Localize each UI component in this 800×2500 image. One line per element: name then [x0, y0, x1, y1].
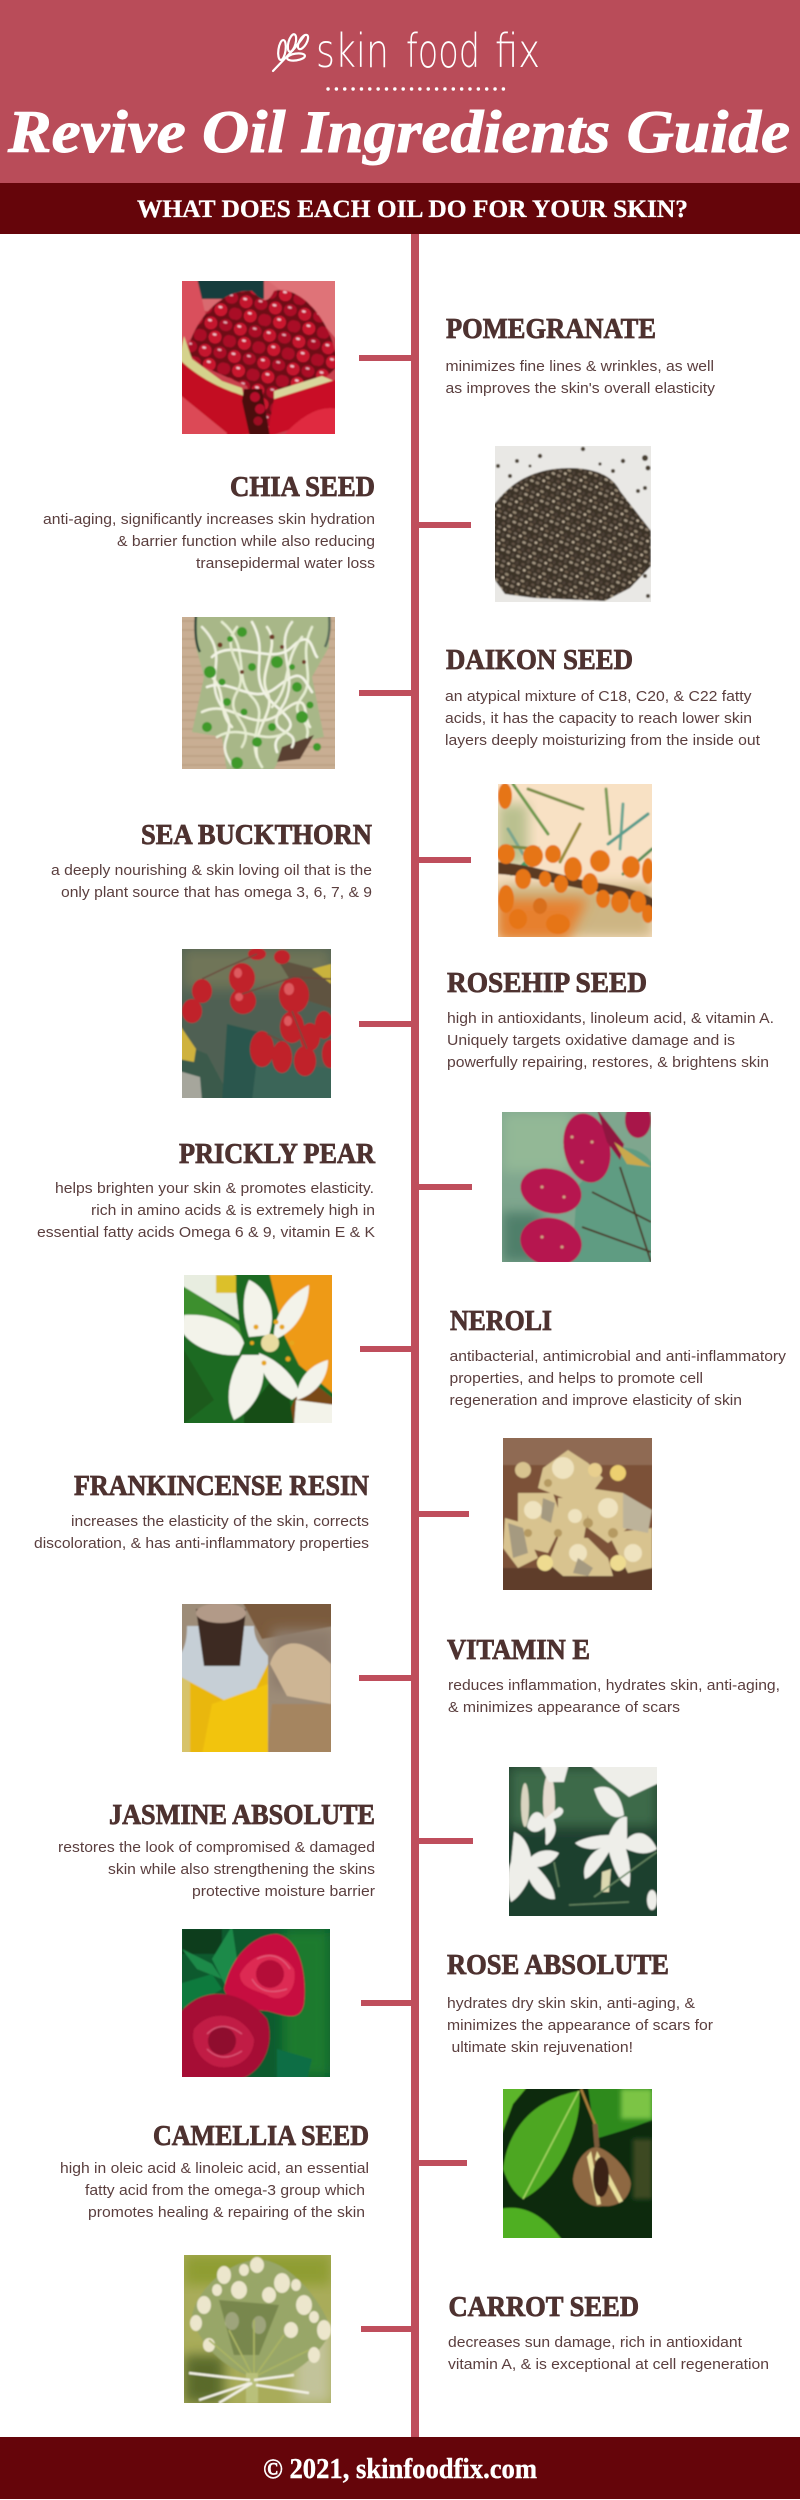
- heading: ROSEHIP SEED: [447, 967, 647, 999]
- heading: ROSE ABSOLUTE: [447, 1949, 669, 1981]
- panel: chia seed: [43, 443, 654, 605]
- panel: frankincense resin: [34, 1435, 655, 1593]
- description: [43, 511, 375, 572]
- description: anti-aging, significantly increases skin hydration: [43, 511, 375, 528]
- description: skin while also strengthening the skins: [108, 1861, 375, 1878]
- description: as improves the skin's overall elasticity: [446, 380, 716, 397]
- description: promotes healing & repairing of the skin: [88, 2204, 365, 2221]
- photo: sea buckthorn: [498, 784, 652, 937]
- panel: rose absolute: [179, 1926, 713, 2080]
- description: ultimate skin rejuvenation!: [452, 2039, 633, 2056]
- description: [450, 1348, 787, 1409]
- panel: carrot seed: [181, 2252, 769, 2406]
- description: discoloration, & has anti-inflammatory properties: [34, 1535, 369, 1552]
- heading: JASMINE ABSOLUTE: [109, 1799, 375, 1831]
- description: only plant source that has omega 3, 6, 7, & 9: [61, 884, 372, 901]
- subtitle band: [0, 183, 800, 234]
- description: reduces inflammation, hydrates skin, anti-aging,: [448, 1677, 780, 1694]
- heading: NEROLI: [450, 1305, 552, 1337]
- connector: [419, 2160, 467, 2166]
- heading: CHIA SEED: [230, 471, 375, 503]
- panel: camellia seed: [60, 2086, 655, 2241]
- photo: daikon sprouts: [182, 617, 335, 769]
- panel: vitamin e: [179, 1601, 780, 1755]
- heading: FRANKINCENSE RESIN: [74, 1470, 369, 1502]
- description: fatty acid from the omega-3 group which: [85, 2182, 365, 2199]
- footer: [0, 2437, 800, 2499]
- description: [58, 1839, 375, 1900]
- description: regeneration and improve elasticity of skin: [450, 1392, 742, 1409]
- connector: [359, 690, 411, 696]
- title: Revive Oil Ingredients Guide: [7, 99, 790, 165]
- photo: frankincense resin: [503, 1438, 652, 1590]
- heading: PRICKLY PEAR: [179, 1138, 376, 1170]
- description: [448, 1677, 780, 1716]
- header banner: [0, 0, 800, 183]
- description: essential fatty acids Omega 6 & 9, vitamin E & K: [37, 1224, 375, 1241]
- connector: [359, 1021, 411, 1027]
- description: an atypical mixture of C18, C20, & C22 fatty: [445, 688, 752, 705]
- connector: [359, 355, 411, 361]
- panel: sea buckthorn: [51, 781, 655, 940]
- connector: [361, 2000, 411, 2006]
- description: hydrates dry skin skin, anti-aging, &: [447, 1995, 695, 2012]
- description: restores the look of compromised & damaged: [58, 1839, 375, 1856]
- description: [37, 1180, 375, 1241]
- logo wordmark: fix: [495, 24, 540, 78]
- icon: leaf sprig: [273, 33, 310, 71]
- dotted divider: [328, 87, 510, 91]
- panel: daikon seed: [179, 614, 761, 773]
- photo: chia seeds: [495, 446, 651, 602]
- description: acids, it has the capacity to reach lower skin: [445, 710, 752, 727]
- description: increases the elasticity of the skin, corrects: [71, 1513, 369, 1530]
- description: helps brighten your skin & promotes elasticity.: [55, 1180, 374, 1197]
- photo: prickly pear: [502, 1112, 651, 1262]
- photo: camellia seed pod: [503, 2089, 652, 2238]
- description: [447, 1995, 713, 2056]
- description: [445, 688, 761, 749]
- connector: [419, 1838, 473, 1844]
- connector: [419, 1184, 472, 1190]
- heading: SEA BUCKTHORN: [141, 819, 372, 851]
- description: & barrier function while also reducing: [117, 533, 375, 550]
- connector: [419, 522, 471, 528]
- description: [51, 862, 372, 901]
- panel: pomegranate: [179, 278, 716, 437]
- description: antibacterial, antimicrobial and anti-inflammatory: [450, 1348, 787, 1365]
- photo: neroli blossom: [184, 1275, 332, 1423]
- description: a deeply nourishing & skin loving oil that is the: [51, 862, 372, 879]
- heading: DAIKON SEED: [446, 644, 633, 676]
- connector: [361, 2326, 411, 2332]
- panel: rosehip seed: [179, 946, 774, 1101]
- connector: [359, 1675, 411, 1681]
- description: layers deeply moisturizing from the inside out: [445, 732, 761, 749]
- heading: VITAMIN E: [447, 1634, 590, 1666]
- description: rich in amino acids & is extremely high in: [91, 1202, 375, 1219]
- description: minimizes fine lines & wrinkles, as well: [446, 358, 714, 375]
- heading: POMEGRANATE: [446, 313, 656, 345]
- description: high in antioxidants, linoleum acid, & vitamin A.: [447, 1010, 774, 1027]
- photo: vitamin e oil bottle: [182, 1604, 331, 1752]
- description: [448, 2334, 769, 2373]
- photo: jasmine flowers: [509, 1767, 657, 1916]
- panel: jasmine absolute: [58, 1764, 661, 1919]
- heading: CAMELLIA SEED: [153, 2120, 369, 2152]
- photo: carrot seed flower: [184, 2255, 331, 2403]
- description: transepidermal water loss: [196, 555, 375, 572]
- photo: pomegranate: [182, 281, 335, 434]
- footer: © 2021, skinfoodfix.com: [263, 2454, 537, 2485]
- connector: [419, 1511, 469, 1517]
- timeline spine: [411, 234, 419, 2437]
- heading: CARROT SEED: [448, 2291, 639, 2323]
- description: [60, 2160, 369, 2221]
- description: vitamin A, & is exceptional at cell regeneration: [448, 2356, 769, 2373]
- panel: prickly pear: [37, 1102, 654, 1272]
- photo: red roses: [182, 1929, 330, 2077]
- description: Uniquely targets oxidative damage and is: [447, 1032, 735, 1049]
- description: protective moisture barrier: [192, 1883, 375, 1900]
- description: [446, 358, 716, 397]
- logo wordmark: [316, 24, 540, 78]
- photo: rosehip berries: [182, 949, 331, 1098]
- subtitle band: WHAT DOES EACH OIL DO FOR YOUR SKIN?: [137, 196, 688, 223]
- description: high in oleic acid & linoleic acid, an essential: [60, 2160, 369, 2177]
- description: [447, 1010, 774, 1071]
- description: powerfully repairing, restores, & brightens skin: [447, 1054, 769, 1071]
- description: decreases sun damage, rich in antioxidant: [448, 2334, 743, 2351]
- description: [34, 1513, 369, 1552]
- description: & minimizes appearance of scars: [448, 1699, 680, 1716]
- description: minimizes the appearance of scars for: [447, 2017, 713, 2034]
- logo wordmark: skin: [316, 24, 389, 78]
- description: properties, and helps to promote cell: [450, 1370, 703, 1387]
- connector: [419, 857, 471, 863]
- panel: neroli: [181, 1272, 787, 1426]
- connector: [360, 1346, 411, 1352]
- logo wordmark: food: [406, 24, 480, 78]
